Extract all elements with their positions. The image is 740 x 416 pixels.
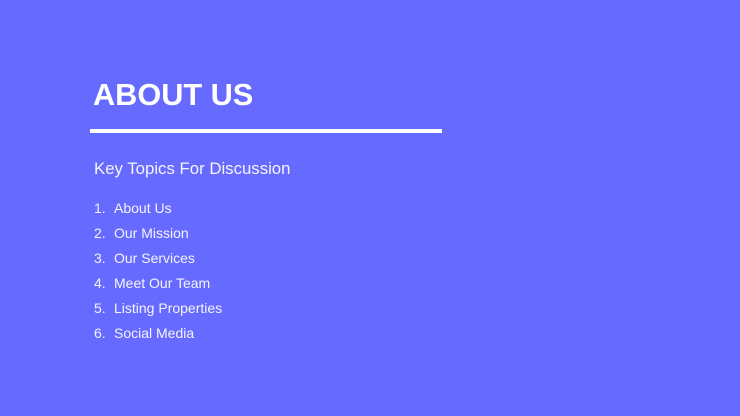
list item 3: Our Services: [114, 250, 195, 266]
list item 6: 6.: [94, 325, 106, 341]
list item 4: Meet Our Team: [114, 275, 210, 291]
list item 1: 1.: [94, 200, 106, 216]
subtitle: Key Topics For Discussion: [94, 159, 290, 178]
title underline: [90, 129, 442, 133]
topic list: [94, 200, 222, 341]
list item 2: 2.: [94, 225, 106, 241]
list item 6: Social Media: [114, 325, 194, 341]
title: ABOUT US: [93, 77, 253, 112]
list item 5: Listing Properties: [114, 300, 222, 316]
list item 1: About Us: [114, 200, 172, 216]
list item 5: 5.: [94, 300, 106, 316]
list item 4: 4.: [94, 275, 106, 291]
list item 2: Our Mission: [114, 225, 189, 241]
list item 3: 3.: [94, 250, 106, 266]
